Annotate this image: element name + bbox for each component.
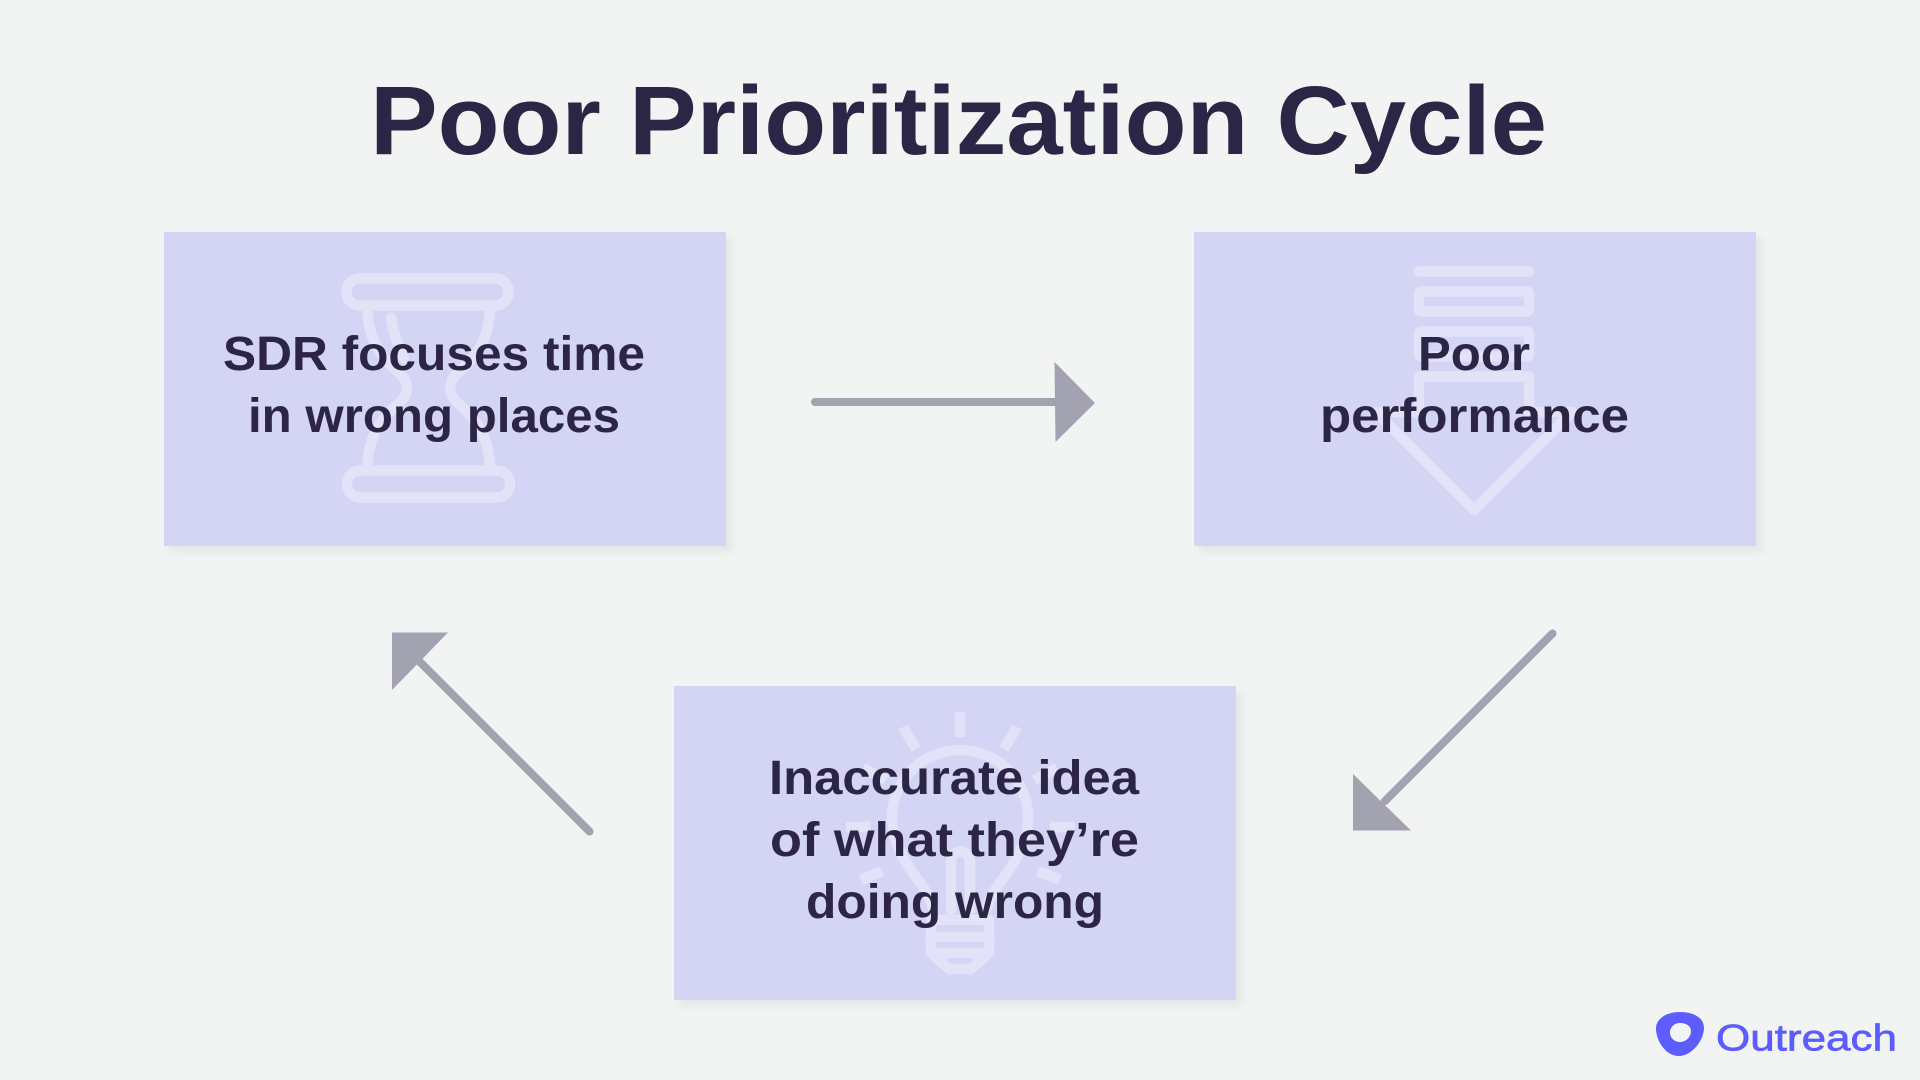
icon: hourglass xyxy=(346,278,510,498)
arrow: right box down to bottom box xyxy=(1353,634,1552,830)
panel: Poor performance xyxy=(1194,232,1756,546)
logo wordmark: Outreach xyxy=(1716,1018,1897,1058)
arrow: bottom box up to left box xyxy=(392,632,590,832)
panel text: Poor xyxy=(1418,328,1530,381)
title: Poor Prioritization Cycle xyxy=(370,66,1547,175)
panel text: in wrong places xyxy=(248,390,620,443)
logo: Outreach xyxy=(1656,1012,1897,1058)
panel: Inaccurate idea of what they're doing wrong xyxy=(674,686,1236,1000)
arrow: top boxes left to right xyxy=(815,362,1095,442)
panel text: doing wrong xyxy=(806,876,1104,929)
panel text: Inaccurate idea xyxy=(769,752,1139,805)
panel: SDR focuses time in wrong places xyxy=(164,232,726,546)
panel text xyxy=(769,752,1139,929)
panel text xyxy=(1320,328,1629,443)
panel text: SDR focuses time xyxy=(223,328,645,381)
icon: stacked down arrow xyxy=(1376,272,1572,510)
panel text xyxy=(223,328,645,443)
panel text: performance xyxy=(1320,390,1629,443)
icon: light bulb xyxy=(846,712,1074,969)
icon: Outreach shield xyxy=(1656,1012,1704,1056)
panel text: of what they’re xyxy=(770,814,1139,867)
